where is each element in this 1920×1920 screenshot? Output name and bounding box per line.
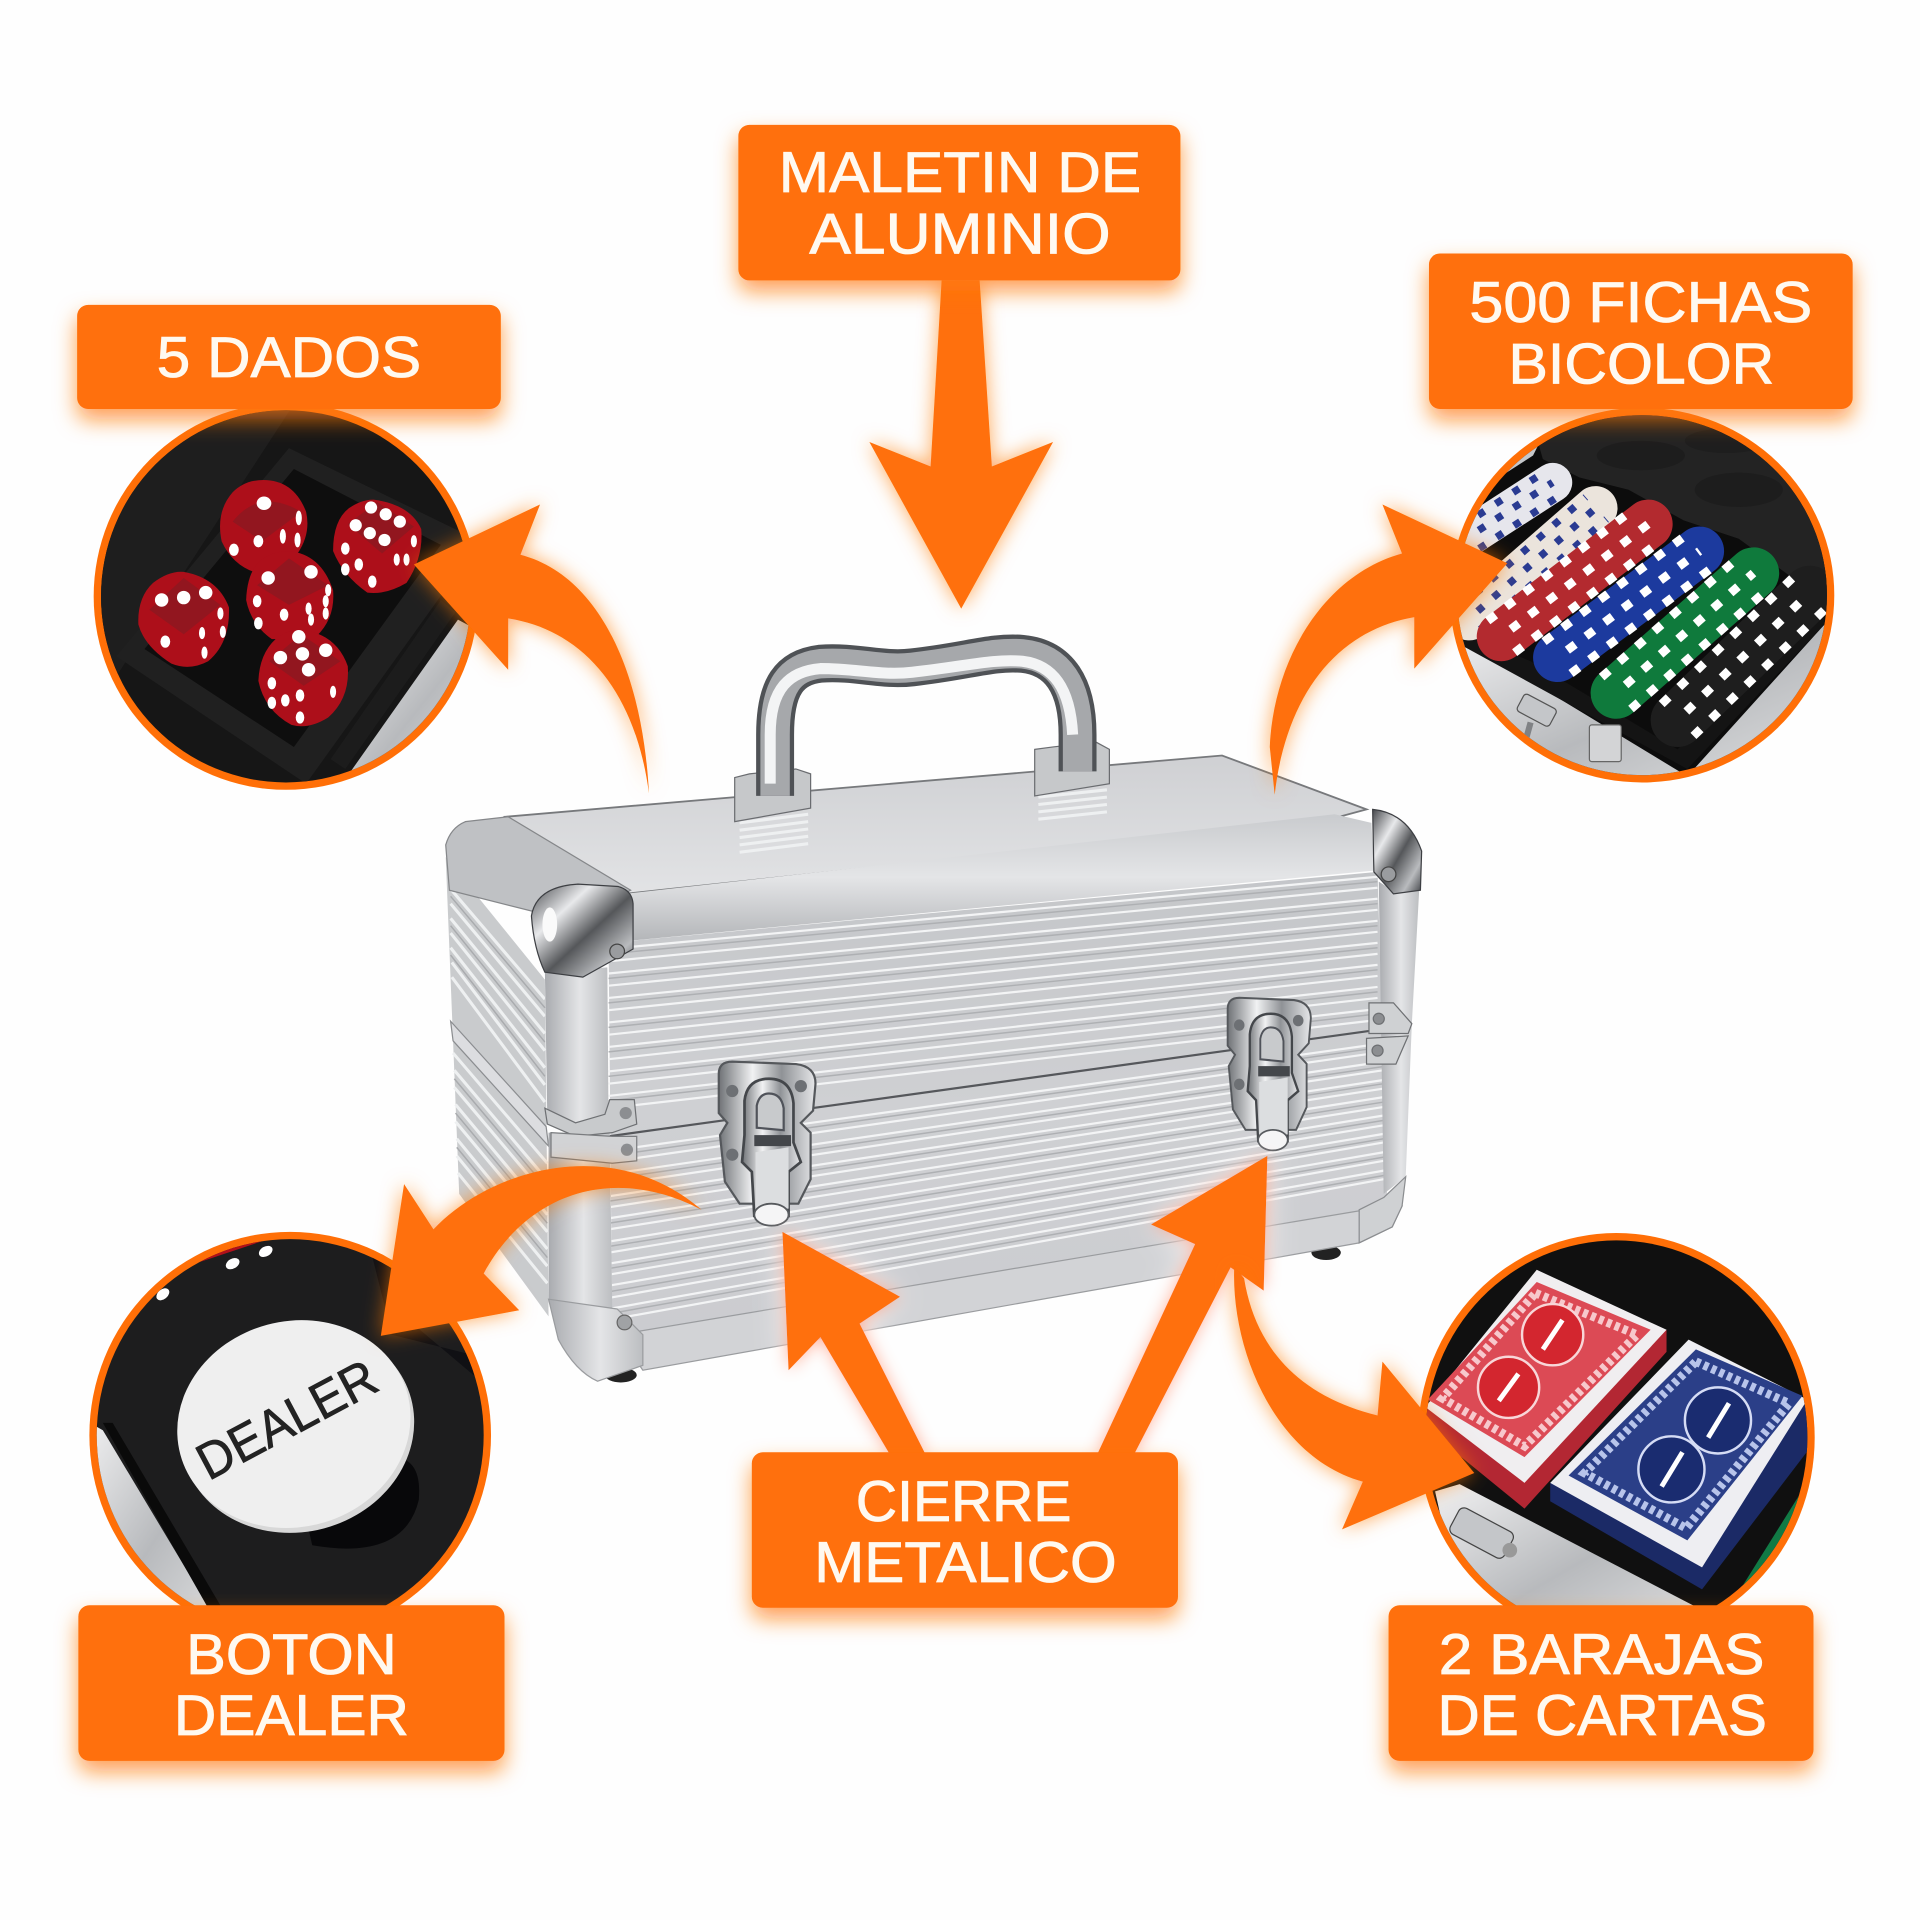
label: 500 fichas bicolor: 500 FICHAS <box>1469 271 1812 335</box>
case right hinges <box>1367 1003 1412 1064</box>
label: 500 fichas bicolor <box>1429 253 1853 409</box>
case front panel <box>609 872 1387 1337</box>
case bottom left corner <box>549 1299 643 1381</box>
aluminium case <box>446 653 1422 1382</box>
case front top rail <box>624 814 1374 940</box>
chrome corner left <box>531 884 633 977</box>
case feet <box>605 1245 1341 1382</box>
icon: die centre <box>246 551 333 639</box>
red deck <box>1425 1270 1667 1509</box>
panel: dealer button photo <box>89 1232 491 1606</box>
chip roll black <box>1662 577 1826 736</box>
handle bracket reflections <box>740 790 1107 852</box>
chip roll blue <box>1544 535 1713 673</box>
label: boton dealer <box>78 1605 504 1761</box>
arrow: to dice <box>414 504 649 793</box>
label: boton dealer: DEALER <box>174 1684 409 1748</box>
label: maletin de aluminio <box>738 125 1180 280</box>
label: maletin de aluminio: MALETIN DE <box>779 141 1141 205</box>
blue deck <box>1550 1340 1812 1589</box>
case lid top <box>506 756 1367 894</box>
label: 5 dados: 5 DADOS <box>157 326 421 390</box>
rivet <box>617 1315 632 1330</box>
dealer button edge <box>157 1299 438 1559</box>
foam lid <box>1539 415 1826 580</box>
case left pillar <box>545 967 609 1125</box>
label: boton dealer: BOTON <box>186 1623 397 1687</box>
chip roll green <box>1602 557 1768 709</box>
chip roll white 1 <box>1461 471 1565 549</box>
icon: die left <box>138 572 229 667</box>
right latch <box>1228 998 1311 1150</box>
handle <box>770 653 1078 796</box>
panel: dice photo <box>94 409 475 790</box>
case bottom band <box>618 1206 1402 1370</box>
chip roll white 2 <box>1460 497 1607 629</box>
case latches <box>1516 693 1621 762</box>
icon: die top left <box>220 480 307 573</box>
label: 2 barajas de cartas: 2 BARAJAS <box>1439 1623 1764 1687</box>
case left hinges <box>545 1100 637 1163</box>
latch on case <box>1448 1506 1517 1560</box>
arrow: down to case <box>869 280 1053 609</box>
icon: die top right <box>333 500 422 593</box>
case right pillar <box>1379 882 1419 1194</box>
label: 500 fichas bicolor: BICOLOR <box>1509 332 1774 396</box>
panel: playing cards photo <box>1420 1233 1815 1606</box>
arrow: to left latch <box>782 1232 927 1457</box>
case left side <box>446 857 549 1316</box>
label: cierre metalico: METALICO <box>814 1531 1117 1595</box>
case bottom right corner <box>1359 1177 1406 1243</box>
arrow: to chips <box>1270 504 1507 795</box>
case left pillar lower <box>549 1133 612 1309</box>
label: 5 dados <box>77 305 501 409</box>
case handle edge <box>1506 446 1538 473</box>
case left rail <box>446 817 631 911</box>
left latch <box>719 1062 816 1226</box>
chip roll red <box>1488 508 1662 653</box>
arrow: to right latch <box>1096 1156 1267 1457</box>
label: maletin de aluminio: ALUMINIO <box>809 202 1111 266</box>
dealer button disc <box>154 1294 434 1554</box>
icon: die bottom <box>258 629 348 726</box>
label: cierre metalico <box>752 1452 1178 1608</box>
dealer button text: DEALER <box>187 1348 387 1491</box>
arrow: to cards <box>1234 1266 1474 1529</box>
chrome corner right <box>1373 809 1422 894</box>
panel: chips photo <box>1445 398 1843 796</box>
label: 2 barajas de cartas: DE CARTAS <box>1438 1684 1767 1748</box>
arrow: to dealer button <box>381 1166 702 1336</box>
label: cierre metalico: CIERRE <box>856 1470 1071 1534</box>
label: 2 barajas de cartas <box>1389 1605 1813 1761</box>
handle brackets <box>735 742 1109 822</box>
case metal edge <box>1463 624 1824 776</box>
